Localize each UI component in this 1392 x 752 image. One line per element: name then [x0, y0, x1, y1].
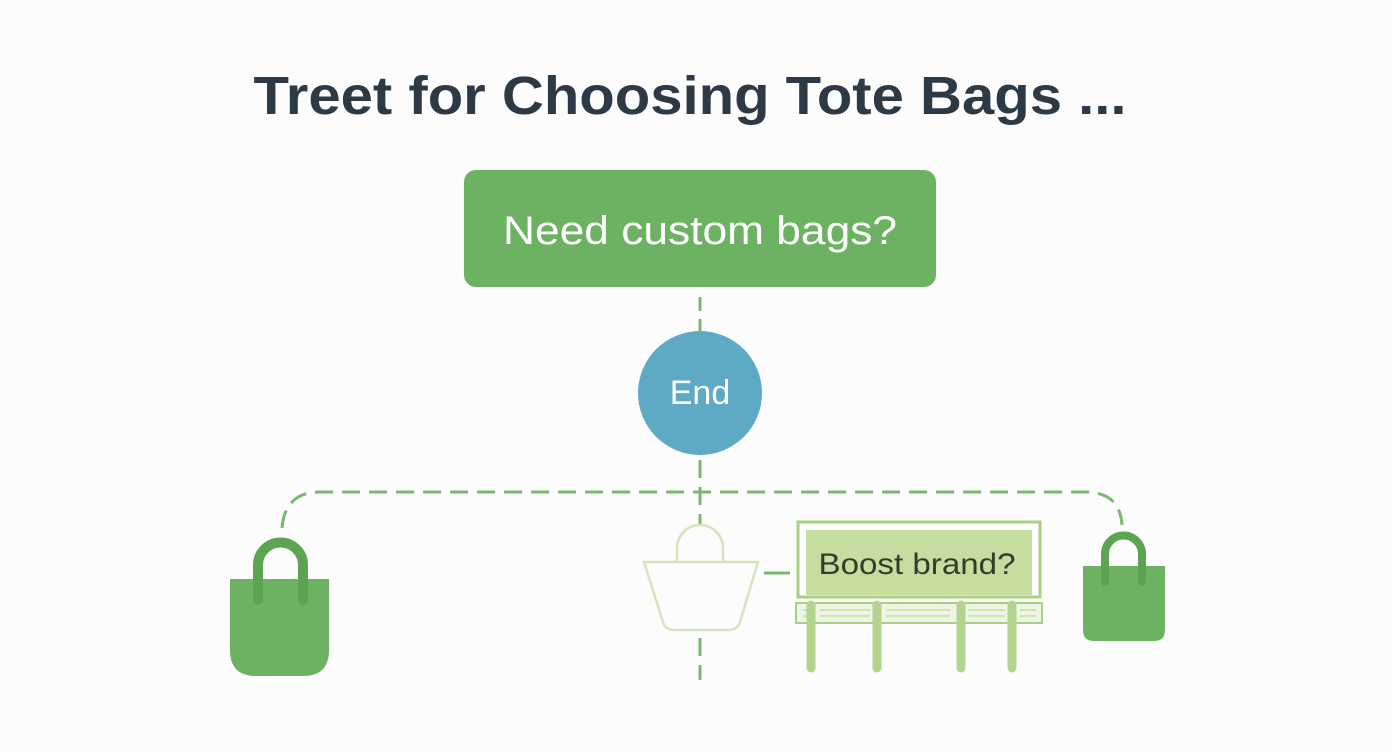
title: Treet for Choosing Tote Bags ...	[254, 66, 1126, 126]
box: need custom bags: Need custom bags?	[503, 209, 897, 253]
circle: end	[638, 331, 762, 455]
billboard: boost brand	[796, 522, 1042, 668]
billboard: boost brand: Boost brand?	[818, 548, 1016, 581]
box: need custom bags	[464, 170, 936, 287]
connector: box to end	[698, 297, 702, 332]
circle: end: End	[670, 374, 730, 412]
icon: left bag	[230, 543, 329, 676]
icon: right bag	[1083, 536, 1165, 641]
connector: dashed branch lines	[282, 460, 1122, 680]
connector: bag to billboard	[764, 572, 790, 574]
icon: open bag outline	[644, 525, 758, 630]
